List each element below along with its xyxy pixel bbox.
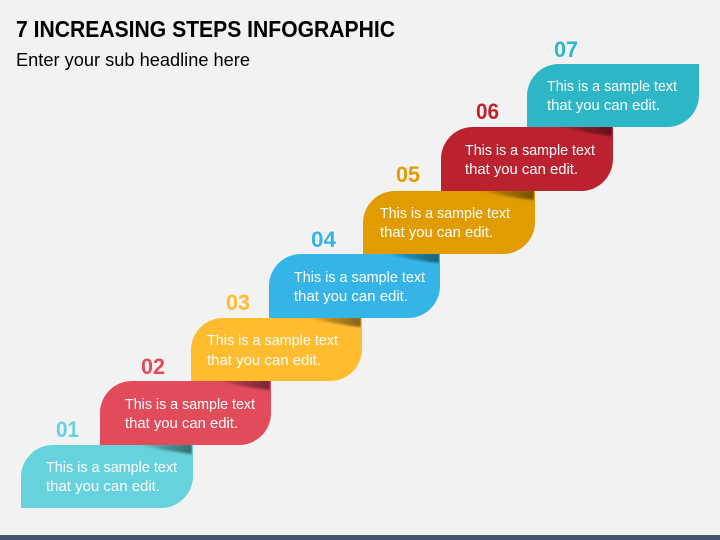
text 01: that you can edit. bbox=[46, 478, 160, 495]
text 05: that you can edit. bbox=[380, 224, 493, 241]
title: 7 INCREASING STEPS INFOGRAPHIC bbox=[16, 16, 395, 42]
number 02: 02 bbox=[141, 354, 165, 379]
text 06: This is a sample text bbox=[465, 142, 596, 159]
text 05: This is a sample text bbox=[380, 205, 511, 222]
number 04: 04 bbox=[311, 227, 337, 252]
step 02 bbox=[100, 354, 271, 445]
panel 05 bbox=[363, 191, 535, 254]
text 07: This is a sample text bbox=[547, 78, 678, 95]
panel 01 bbox=[21, 445, 193, 508]
text 03: This is a sample text bbox=[207, 332, 339, 349]
number 03: 03 bbox=[226, 290, 250, 315]
text 02: This is a sample text bbox=[125, 396, 256, 413]
shadow 04 bbox=[382, 253, 439, 263]
panel 02 bbox=[100, 381, 271, 445]
text 03: that you can edit. bbox=[207, 352, 321, 369]
shadow 03 bbox=[304, 317, 361, 327]
panel 04 bbox=[269, 254, 440, 318]
step 07 bbox=[527, 37, 699, 127]
text 04: that you can edit. bbox=[294, 288, 408, 305]
footer bar bbox=[0, 535, 720, 540]
shadow 01 bbox=[135, 444, 192, 454]
text 07: that you can edit. bbox=[547, 97, 660, 114]
number 05: 05 bbox=[396, 162, 420, 187]
step 01 bbox=[21, 417, 193, 508]
panel 06 bbox=[441, 127, 613, 191]
text 01: This is a sample text bbox=[46, 459, 178, 476]
shadow 05 bbox=[477, 190, 534, 200]
panel 03 bbox=[191, 318, 362, 381]
subtitle: Enter your sub headline here bbox=[16, 50, 250, 70]
number 07: 07 bbox=[554, 37, 578, 62]
text 06: that you can edit. bbox=[465, 161, 578, 178]
step 06 bbox=[441, 99, 613, 191]
step 03 bbox=[191, 290, 362, 381]
step 05 bbox=[363, 162, 535, 254]
text 02: that you can edit. bbox=[125, 415, 238, 432]
panel 07 bbox=[527, 64, 699, 127]
number 06: 06 bbox=[476, 99, 499, 124]
shadow 06 bbox=[563, 127, 612, 137]
shadow 02 bbox=[213, 380, 270, 390]
text 04: This is a sample text bbox=[294, 269, 426, 286]
number 01: 01 bbox=[56, 417, 79, 442]
step 04 bbox=[269, 227, 440, 318]
